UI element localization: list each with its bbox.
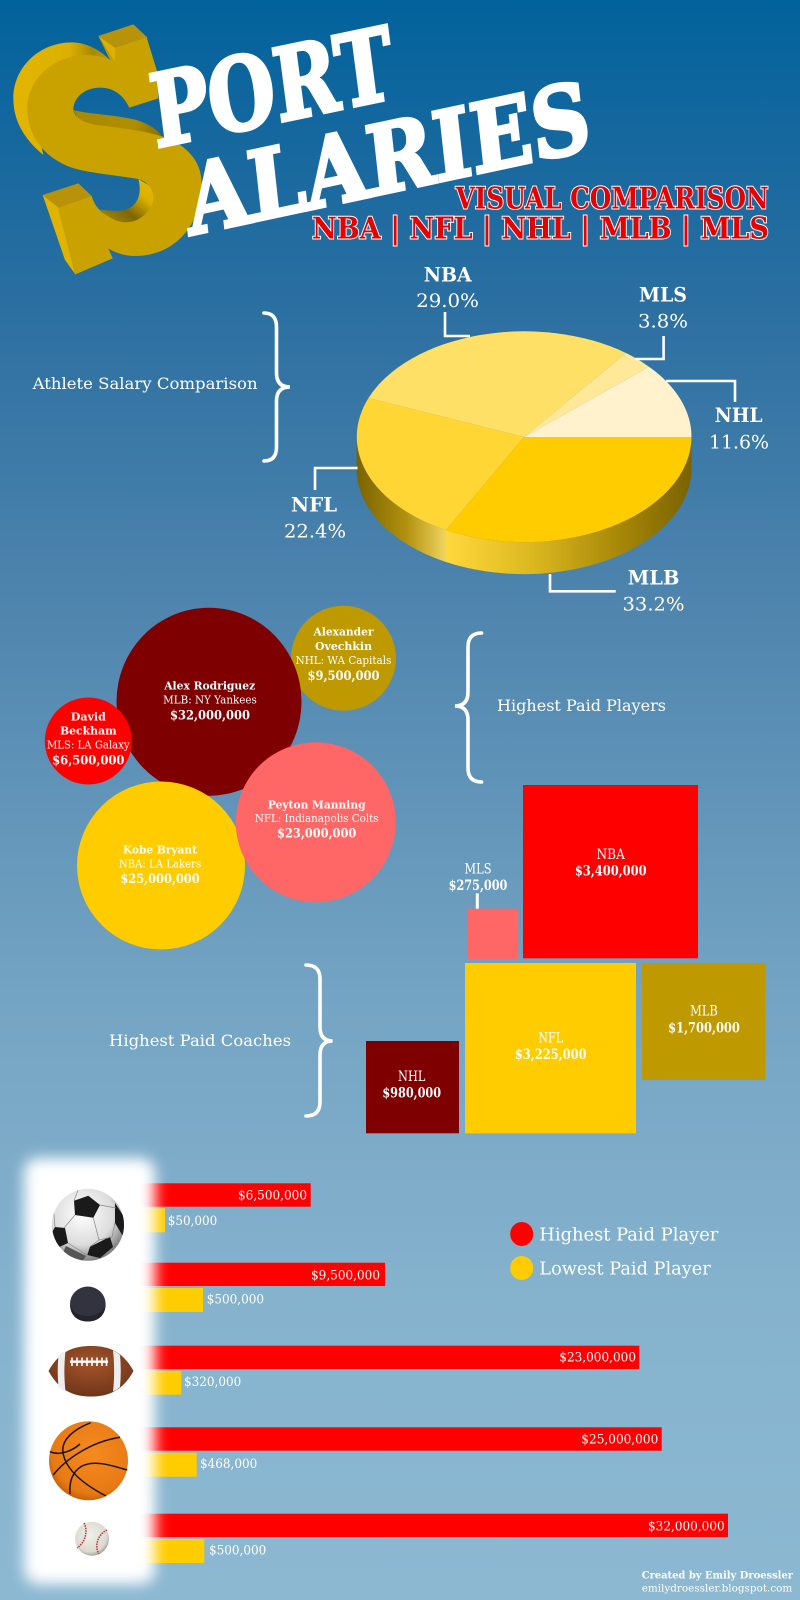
credit: Created by Emily Droessler (642, 1569, 793, 1581)
bubble: Bryant (77, 782, 245, 950)
heading: highest paid players: Highest Paid Players (497, 696, 666, 715)
bubble: Manning: Peyton Manning (268, 797, 366, 811)
bubble: Ovechkin: Alexander (313, 625, 374, 639)
square: MLS coach: $275,000 (449, 878, 507, 894)
bar values (168, 1188, 725, 1558)
title: Sport Salaries (144, 4, 595, 258)
label: NBA share: 29.0% (416, 290, 479, 312)
square: MLS coach: MLS (464, 861, 492, 877)
label: NFL share: 22.4% (284, 521, 346, 543)
bubble chart: highest paid players (45, 606, 396, 950)
bar values: $500,000 (207, 1293, 264, 1308)
label: MLS share: 3.8% (638, 311, 688, 333)
brace: highest paid players (455, 633, 482, 782)
legend: lowest: Lowest Paid Player (539, 1259, 711, 1279)
bars: basketball (140, 1427, 662, 1477)
bubble: Manning: $23,000,000 (277, 827, 356, 842)
label: NHL share: NHL (715, 403, 763, 427)
bubble: Ovechkin: NHL: WA Capitals (296, 654, 392, 667)
icon: hockey puck (70, 1286, 106, 1322)
bubble: Manning (236, 742, 396, 902)
label: MLB share: 33.2% (622, 594, 684, 616)
slice: NHL (524, 367, 692, 437)
bar values: $23,000,000 (559, 1351, 636, 1366)
bubble: Beckham: David (71, 710, 106, 724)
label: MLB share: MLB (628, 565, 679, 589)
label: NBA share: NBA (424, 263, 472, 287)
icon: 3D gold dollar S (13, 24, 202, 274)
bubble: Beckham: MLS: LA Galaxy (47, 739, 130, 752)
bubble: Ovechkin (291, 606, 396, 711)
square: MLB coach (642, 963, 765, 1080)
square: NBA coach: NBA (597, 847, 625, 863)
bar chart: highest vs lowest paid player (140, 1183, 728, 1563)
bar values: $50,000 (168, 1214, 217, 1229)
bar values: $468,000 (200, 1457, 257, 1472)
label: NHL share: 11.6% (709, 432, 769, 454)
label: NFL share (284, 468, 358, 543)
slice: NBA (368, 331, 626, 437)
icon: soccer ball (50, 1189, 126, 1262)
bars: hockey (140, 1263, 385, 1312)
square: MLB coach: MLB (690, 1004, 718, 1020)
legend (510, 1222, 719, 1280)
pie side (356, 437, 692, 574)
bubble: Rodriguez: MLB: NY Yankees (163, 693, 257, 706)
icon: baseball (75, 1522, 109, 1556)
bar values: $500,000 (209, 1543, 266, 1558)
bubble: Beckham: $6,500,000 (52, 754, 124, 769)
slice: NFL (357, 398, 524, 530)
heading: highest paid coaches: Highest Paid Coaches (109, 1031, 291, 1050)
square: MLB coach: $1,700,000 (668, 1020, 740, 1036)
bubble: Rodriguez: $32,000,000 (170, 708, 250, 723)
square: NBA coach: $3,400,000 (575, 864, 647, 880)
bubble: Beckham (45, 698, 132, 784)
bubble: Bryant: Kobe Bryant (123, 842, 198, 856)
square: NBA coach (523, 785, 698, 958)
square: MLS coach (449, 861, 518, 959)
bubble: Bryant: $25,000,000 (120, 872, 200, 887)
area chart: highest paid coaches (366, 785, 765, 1133)
heading: athlete salary comparison: Athlete Salary Comparison (32, 374, 258, 393)
title: Sport Salaries: ALARIES (179, 61, 595, 258)
bubble: Rodriguez: Alex Rodriguez (163, 678, 256, 692)
square: NHL coach: $980,000 (382, 1085, 441, 1101)
square: NFL coach: $3,225,000 (515, 1047, 587, 1063)
bar values: $320,000 (184, 1375, 241, 1390)
bubble: Ovechkin: Ovechkin (315, 639, 373, 653)
label: MLS share: MLS (639, 283, 687, 307)
bubble: Ovechkin: $9,500,000 (308, 669, 380, 684)
brace: athlete salary (264, 313, 290, 461)
panel: white blurred icon column (24, 1158, 155, 1584)
slice: MLS (524, 353, 649, 437)
bar values: $9,500,000 (311, 1268, 380, 1283)
bar values: $6,500,000 (238, 1188, 307, 1203)
pie chart: salary share by league (356, 331, 692, 574)
label: NBA share (416, 263, 479, 336)
square: NFL coach: NFL (538, 1030, 563, 1046)
bar values: $25,000,000 (581, 1432, 658, 1447)
bars: baseball (140, 1514, 728, 1563)
label: NFL share: NFL (291, 493, 337, 517)
square: NHL coach: NHL (398, 1069, 425, 1085)
label: MLS share (635, 283, 688, 359)
brace: highest paid coaches (306, 965, 333, 1116)
label: MLB share (550, 565, 684, 616)
bubble: Bryant: NBA: LA Lakers (119, 857, 201, 870)
legend: highest: Highest Paid Player (539, 1225, 719, 1245)
credit: emilydroessler.blogspot.com (642, 1583, 792, 1595)
subtitle (312, 180, 769, 246)
icon: basketball (49, 1421, 128, 1500)
bubble: Manning: NFL: Indianapolis Colts (255, 812, 379, 825)
icon: american football (48, 1346, 134, 1396)
bar values: $32,000,000 (648, 1520, 725, 1535)
square: NFL coach (465, 963, 636, 1133)
slice: MLB (446, 437, 692, 542)
bars: soccer (140, 1183, 311, 1232)
bubble: Beckham: Beckham (60, 724, 117, 738)
bars: football (140, 1346, 639, 1395)
label: NHL share (666, 381, 769, 454)
credit (642, 1569, 793, 1595)
bubble: Rodriguez (116, 608, 302, 796)
square: NHL coach (366, 1041, 459, 1133)
